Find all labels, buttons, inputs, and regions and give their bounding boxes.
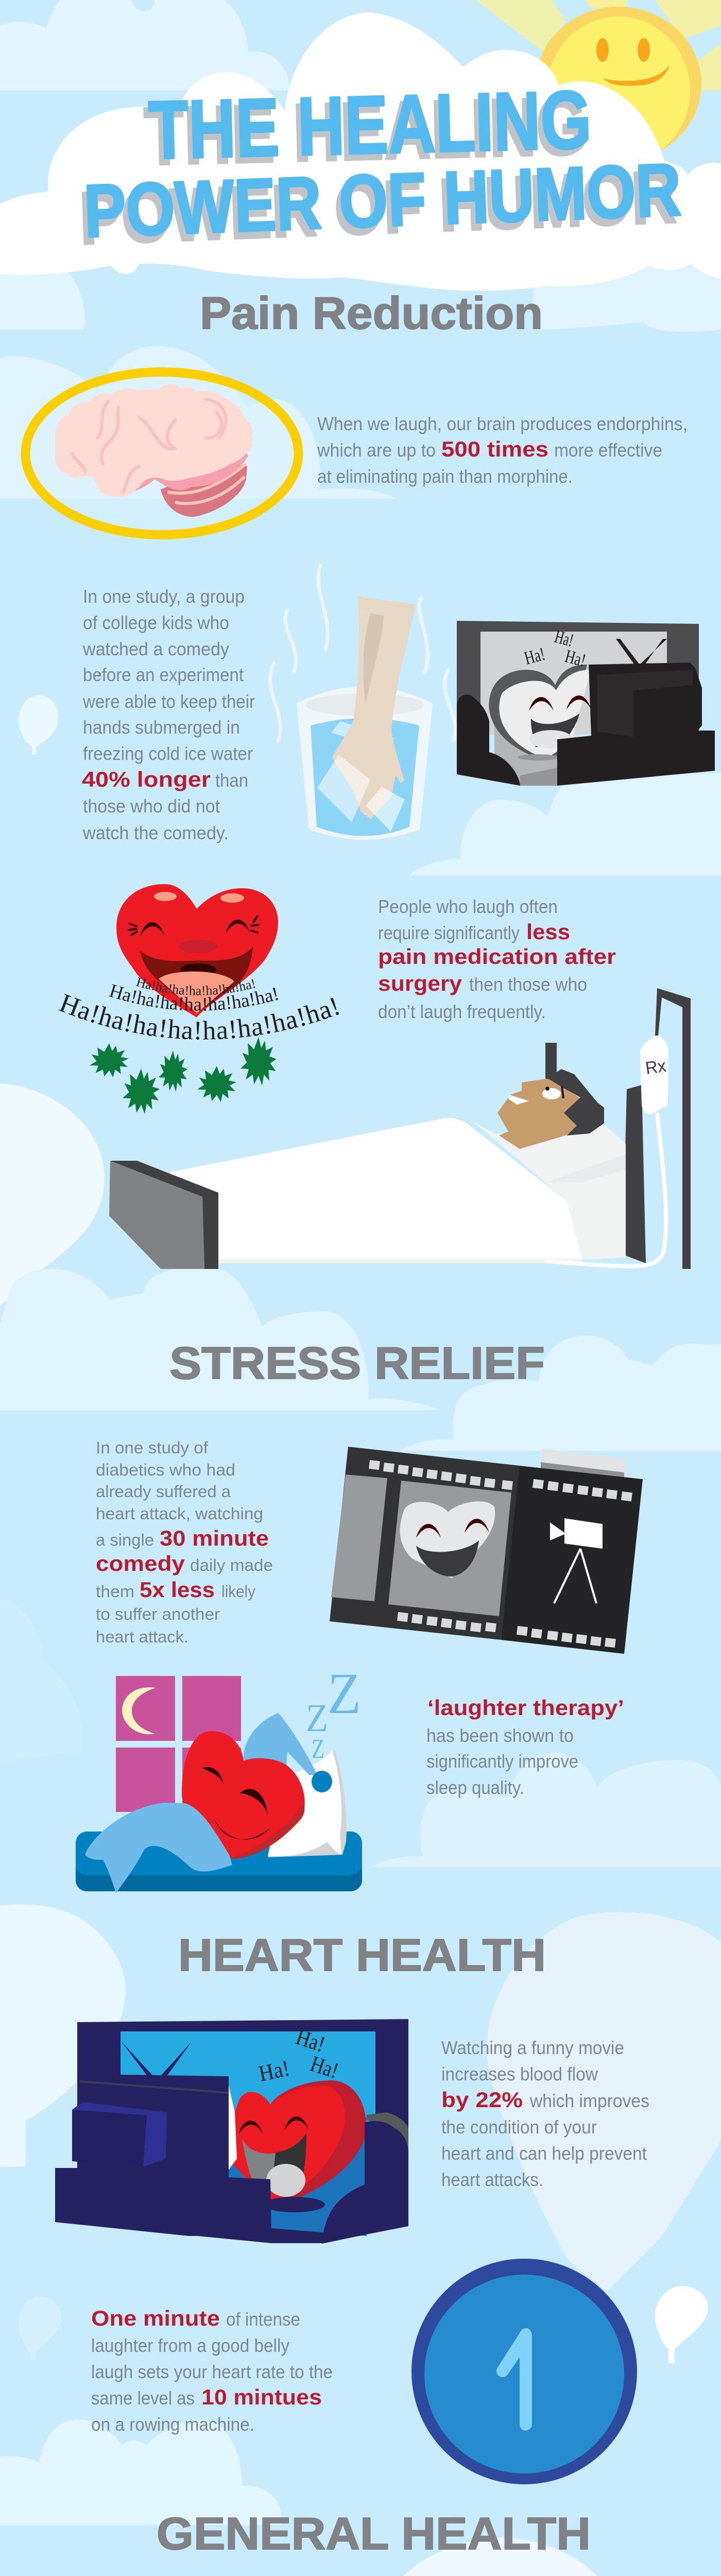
text: diabetics study: comedy — [96, 1551, 185, 1575]
icon: sleeping heart in bed by window — [76, 1662, 362, 1893]
title: THE HEALING — [147, 73, 593, 176]
text: one minute: of intense — [226, 2309, 300, 2330]
text: one minute — [91, 2306, 333, 2435]
text: diabetics study — [96, 1438, 273, 1646]
text: ice water study: than — [215, 770, 248, 791]
icon: film strip with heart and camera — [330, 1447, 643, 1654]
icon: grayscale heart watching tv: Ha! — [553, 626, 576, 651]
heading: heart health: HEART HEALTH — [178, 1929, 546, 1980]
text: one minute: on a rowing machine. — [91, 2414, 254, 2435]
text: diabetics study: already suffered a — [96, 1482, 231, 1501]
text: endorphins: When we laugh, our brain produces endorphins, — [317, 413, 688, 434]
text: blood flow — [441, 2037, 649, 2190]
icon: steam lines — [270, 566, 455, 741]
text: less pain medication: surgery — [378, 971, 462, 995]
text: ice water study: before an experiment — [83, 664, 244, 685]
text: less pain medication: pain medication after — [378, 944, 616, 969]
text: ice water study: those who did not — [83, 795, 220, 817]
icon: heart watching tv on navy sofa: Ha! — [256, 2055, 292, 2087]
text: diabetics study: to suffer another — [96, 1605, 220, 1623]
heading: general health: GENERAL HEALTH — [157, 2508, 591, 2559]
text: laughter therapy: ‘laughter therapy’ — [427, 1696, 624, 1720]
text: endorphins: more effective — [554, 439, 662, 461]
text: ice water study: watch the comedy. — [82, 822, 229, 843]
text: blood flow: Watching a funny movie — [441, 2037, 624, 2058]
icon: sleeping heart in bed by window: Z — [328, 1662, 361, 1726]
icon: number 1 badge — [411, 2259, 637, 2484]
text: blood flow: increases blood flow — [441, 2063, 598, 2084]
icon: patient in hospital bed with iv — [109, 988, 691, 1269]
text: diabetics study: heart attack. — [96, 1628, 188, 1646]
title: THE HEALING — [143, 79, 588, 182]
text: laughter therapy — [426, 1696, 624, 1798]
text: diabetics study: a single — [96, 1531, 154, 1549]
text: less pain medication: don’t laugh frequently. — [378, 1001, 546, 1022]
text: diabetics study: heart attack, watching — [96, 1504, 263, 1523]
text: endorphins — [317, 413, 688, 487]
icon: laughing heart with ha text and green germs: Ha!ha!ha!ha!ha!ha!ha!ha! — [58, 994, 339, 1040]
text: ice water study: watched a comedy — [82, 638, 229, 659]
icon: heart watching tv on navy sofa — [55, 2019, 408, 2244]
text: diabetics study: 5x less — [140, 1578, 215, 1602]
icon: laughing heart with ha text and green germs — [58, 884, 339, 1114]
text: less pain medication: less — [526, 920, 570, 944]
icon: laughing heart with ha text and green germs: Ha!ha!ha!ha!ha!ha!ha! — [109, 984, 278, 1011]
text: endorphins: which are up to — [317, 439, 436, 461]
icon: arm in glass of ice water — [297, 597, 433, 840]
icon: sleeping heart in bed by window: Z — [306, 1697, 328, 1740]
text: less pain medication: require significantly — [378, 922, 520, 943]
white title cloud — [0, 12, 721, 291]
icon: grayscale heart watching tv: Ha! — [563, 646, 588, 671]
text: diabetics study: daily made — [190, 1556, 273, 1574]
text: ice water study: 40% longer — [82, 767, 211, 791]
text: diabetics study: them — [96, 1582, 134, 1601]
text: ice water study: In one study, a group — [83, 586, 245, 607]
icon: laughing heart with ha text and green germs: Ha!ha!ha!ha!ha!ha!ha! — [136, 977, 255, 995]
text: laughter therapy: has been shown to — [426, 1725, 574, 1746]
text: less pain medication — [378, 896, 616, 1022]
text: endorphins: at eliminating pain than morphine. — [317, 466, 573, 487]
icon: sleeping heart in bed by window: Z — [312, 1734, 324, 1764]
title — [78, 73, 682, 260]
text: ice water study: hands submerged in — [83, 717, 240, 738]
icon: grayscale heart watching tv — [457, 621, 715, 786]
text: diabetics study: 30 minute — [160, 1526, 269, 1550]
heading: pain reduction: Pain Reduction — [200, 287, 543, 338]
text: blood flow: the condition of your — [441, 2116, 597, 2138]
text: laughter therapy: significantly improve — [426, 1751, 578, 1772]
text: diabetics study: likely — [221, 1582, 255, 1601]
text: less pain medication: then those who — [469, 974, 587, 995]
text: one minute: One minute — [91, 2306, 220, 2330]
text: diabetics study: diabetics who had — [96, 1461, 235, 1479]
text: laughter therapy: sleep quality. — [426, 1777, 524, 1798]
text: one minute: laugh sets your heart rate to the — [91, 2361, 333, 2382]
icon: smiling sun — [476, 0, 721, 165]
icon: heart watching tv on navy sofa: Ha! — [293, 2024, 328, 2057]
text: less pain medication: People who laugh often — [378, 896, 558, 917]
icon: brain in yellow ring — [26, 372, 299, 535]
text: one minute: same level as — [91, 2387, 195, 2409]
text: ice water study — [82, 586, 255, 843]
text: blood flow: heart and can help prevent — [441, 2143, 647, 2164]
icon: heart watching tv on navy sofa: Ha! — [307, 2051, 341, 2083]
text: ice water study: of college kids who — [83, 612, 229, 633]
text: endorphins: 500 times — [441, 437, 548, 461]
text: diabetics study: In one study of — [96, 1438, 208, 1457]
icon: grayscale heart watching tv: Ha! — [522, 643, 547, 669]
heading: stress relief: STRESS RELIEF — [169, 1337, 545, 1388]
icon: patient in hospital bed with iv: Rx — [644, 1056, 667, 1078]
text: ice water study: were able to keep their — [82, 691, 255, 712]
text: one minute: 10 mintues — [201, 2385, 322, 2409]
text: blood flow: which improves — [529, 2090, 649, 2111]
text: blood flow: by 22% — [441, 2088, 523, 2112]
text: ice water study: freezing cold ice water — [83, 743, 253, 764]
text: one minute: laughter from a good belly — [91, 2335, 289, 2356]
text: blood flow: heart attacks. — [441, 2169, 543, 2190]
